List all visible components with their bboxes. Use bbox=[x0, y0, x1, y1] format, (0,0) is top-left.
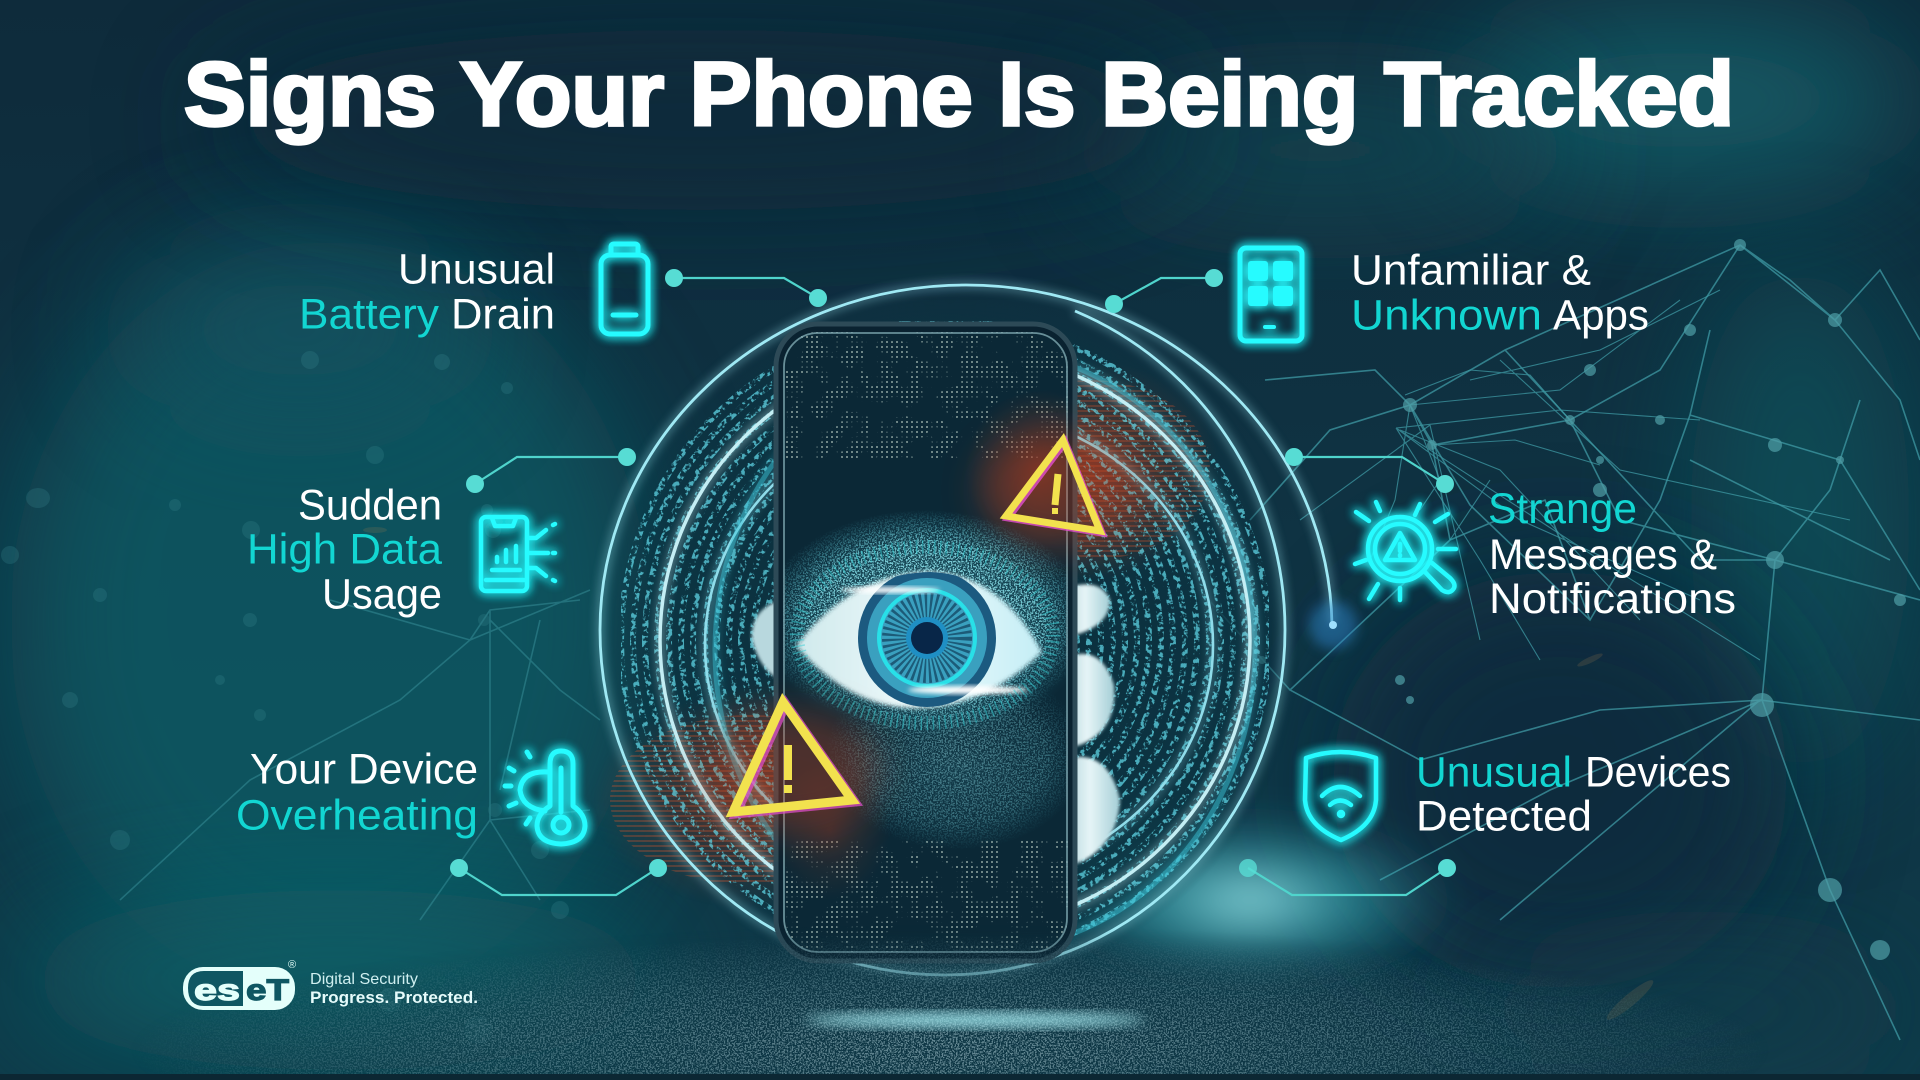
label: strange messages and notifications bbox=[1488, 485, 1736, 623]
eye white bbox=[796, 572, 1042, 708]
label: unusual devices detected: Unusual bbox=[1416, 748, 1572, 796]
warning triangle: upper right bbox=[980, 430, 1140, 550]
eye surround stipple bbox=[783, 512, 1068, 846]
lashes bbox=[797, 547, 1053, 723]
label: unusual devices detected: Devices bbox=[1585, 748, 1731, 796]
label: unusual devices detected bbox=[1416, 748, 1731, 840]
dot matrix texture bbox=[783, 332, 1068, 952]
network lines right bbox=[1200, 239, 1920, 1040]
icon: battery bbox=[601, 244, 648, 334]
label: unfamiliar and unknown apps: Unknown bbox=[1351, 292, 1542, 340]
ESET logo bbox=[183, 959, 296, 1010]
label: unfamiliar and unknown apps: Unfamiliar & bbox=[1351, 246, 1591, 294]
tagline: Progress. Protected. bbox=[310, 988, 478, 1007]
label: your device overheating bbox=[236, 746, 478, 840]
connector: devices bbox=[1239, 859, 1456, 895]
label: unusual battery drain: Drain bbox=[451, 290, 555, 338]
label: strange messages and notifications: Messages & bbox=[1489, 531, 1717, 579]
ESET logo: ® bbox=[288, 959, 296, 971]
fingerprint disc bbox=[590, 295, 1300, 985]
glow: lower right bbox=[1040, 815, 1460, 985]
floor bbox=[0, 920, 1920, 1074]
label: unusual battery drain: Battery bbox=[299, 290, 440, 338]
label: sudden high data usage: Sudden bbox=[298, 482, 442, 530]
title: Signs Your Phone Is Being Tracked bbox=[184, 45, 1734, 145]
label: unfamiliar and unknown apps bbox=[1351, 246, 1649, 340]
label: sudden high data usage bbox=[247, 482, 442, 618]
connector: data bbox=[466, 448, 636, 493]
tagline: Digital Security bbox=[310, 971, 418, 988]
tagline bbox=[310, 971, 478, 1007]
lens flares bbox=[840, 587, 940, 593]
network and bokeh left bbox=[1, 351, 1657, 1044]
phone with eye on screen bbox=[774, 322, 1078, 964]
icon: shield with wifi bbox=[1305, 752, 1376, 840]
arc end glow bbox=[1309, 601, 1357, 649]
connector: battery bbox=[665, 269, 827, 307]
icon: data usage bbox=[481, 517, 555, 591]
label: strange messages and notifications: Strange bbox=[1488, 485, 1637, 533]
connector: apps bbox=[1105, 269, 1223, 313]
connector: messages bbox=[1285, 448, 1454, 493]
iris and pupil bbox=[858, 569, 996, 707]
label: sudden high data usage: Usage bbox=[322, 570, 442, 618]
icon: thermometer bbox=[505, 751, 585, 844]
icon: apps grid bbox=[1240, 248, 1302, 341]
label: strange messages and notifications: Notifications bbox=[1489, 575, 1736, 623]
label: unusual battery drain: Unusual bbox=[398, 246, 555, 294]
label: your device overheating: Overheating bbox=[236, 792, 478, 840]
label: unusual battery drain bbox=[299, 246, 555, 338]
bottom strip bbox=[0, 1074, 1920, 1080]
connector: overheating bbox=[450, 859, 667, 895]
ESET logo: es bbox=[194, 974, 240, 1007]
label: your device overheating: Your Device bbox=[250, 746, 478, 794]
warning triangle: lower left bbox=[700, 702, 880, 830]
label: sudden high data usage: High Data bbox=[247, 526, 442, 574]
hand holding phone bbox=[752, 584, 1120, 870]
icon: magnifier with warning bbox=[1355, 502, 1456, 600]
label: unfamiliar and unknown apps: Apps bbox=[1553, 292, 1649, 340]
ESET logo: eT bbox=[246, 974, 289, 1007]
concentric glowing rings bbox=[600, 285, 1332, 975]
label: unusual devices detected: Detected bbox=[1416, 792, 1592, 840]
